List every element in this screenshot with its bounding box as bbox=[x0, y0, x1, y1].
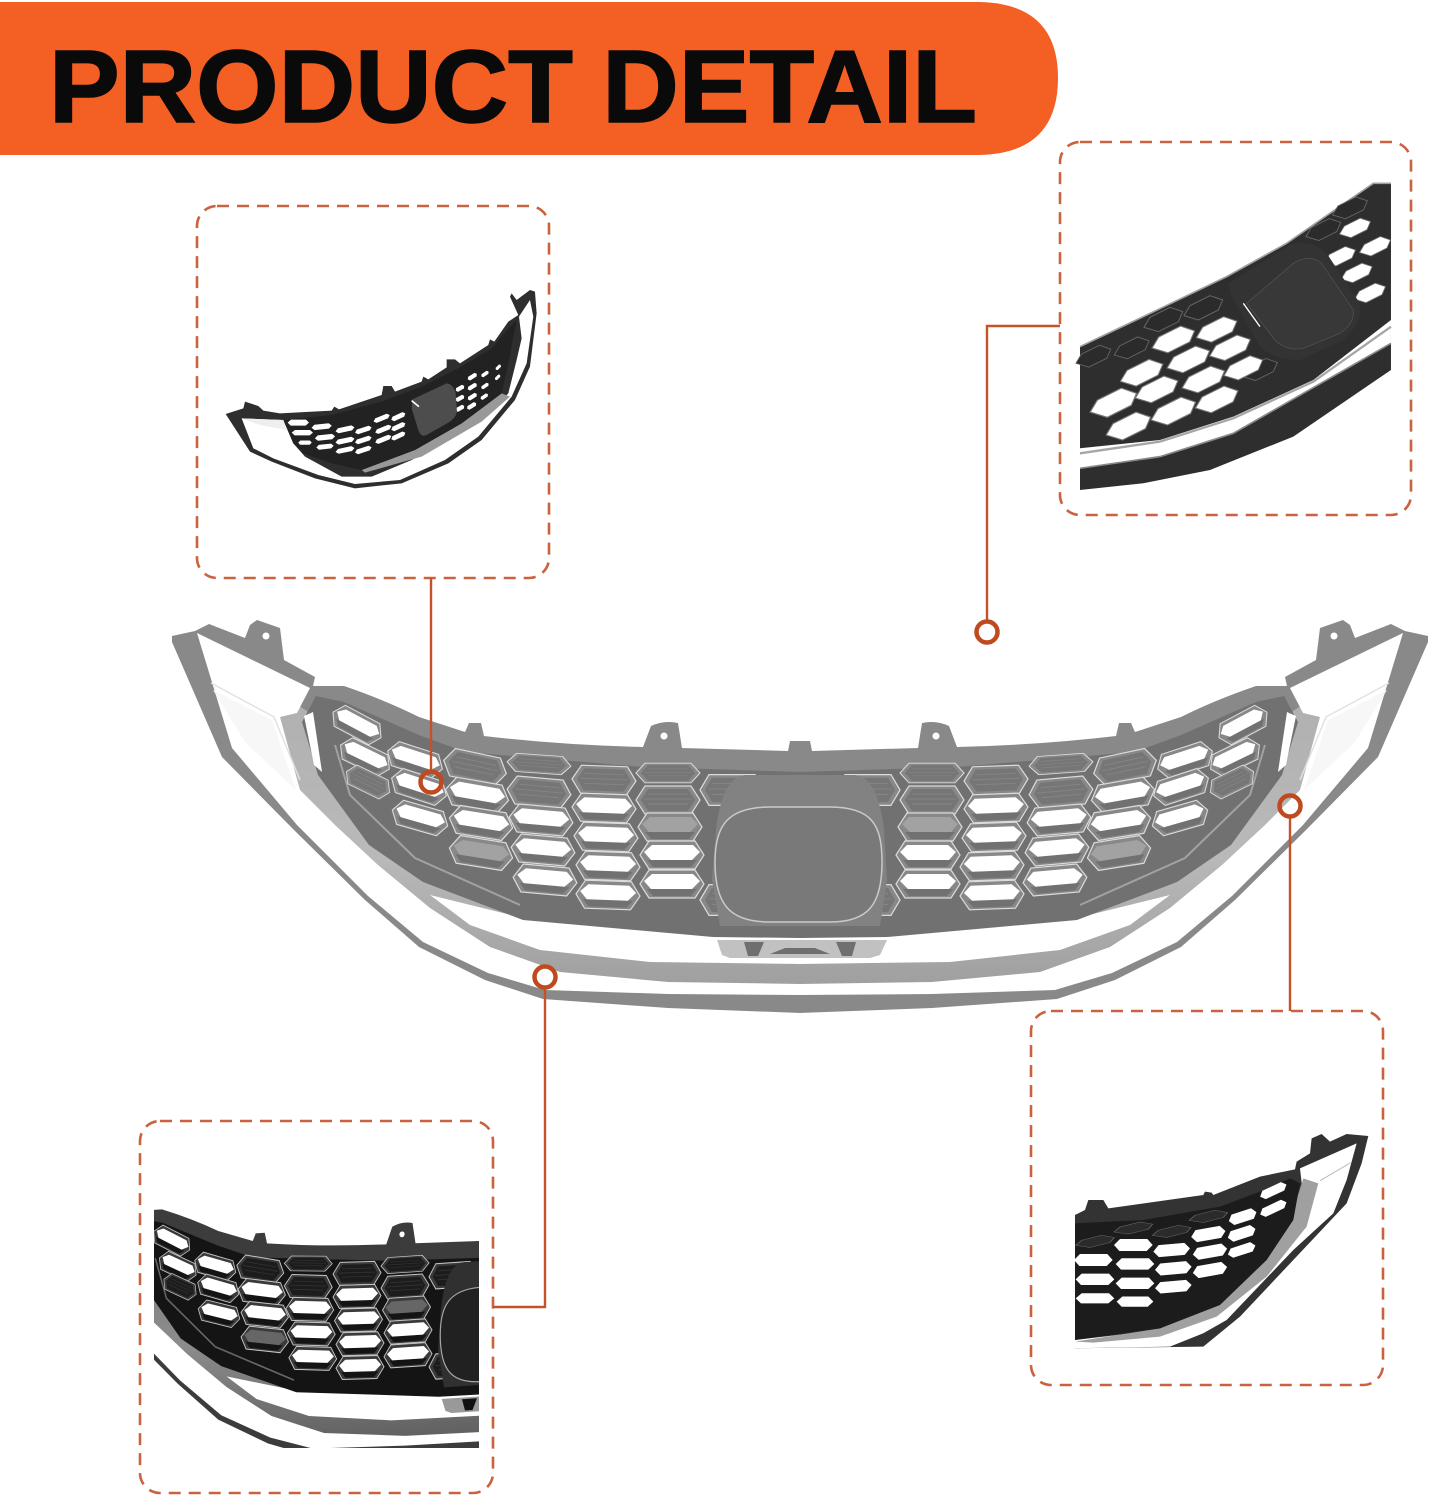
product photo: emblem and chrome strip bbox=[1076, 183, 1391, 490]
connector: top-right panel to marker bbox=[976, 326, 1060, 642]
panel: bottom-left honeycomb close-up bbox=[138, 1120, 494, 1494]
main grille product image bbox=[172, 620, 1428, 1013]
title: PRODUCT DETAIL bbox=[49, 29, 977, 144]
header banner bbox=[0, 2, 1058, 155]
product photo: angled full grille bbox=[226, 290, 537, 488]
product photo: left honeycomb mesh bbox=[154, 1209, 479, 1448]
connector: top-left panel to mesh bbox=[420, 578, 442, 792]
connector: bottom-right panel to chrome edge bbox=[1280, 796, 1300, 1011]
panel: top-left full grille view bbox=[197, 206, 549, 578]
panel: top-right emblem close-up bbox=[1060, 142, 1411, 515]
connector: bottom-left panel to chrome strip bbox=[493, 966, 556, 1307]
panel: bottom-right side view bbox=[1031, 1011, 1383, 1385]
product photo: right side of grille bbox=[1074, 1134, 1368, 1348]
